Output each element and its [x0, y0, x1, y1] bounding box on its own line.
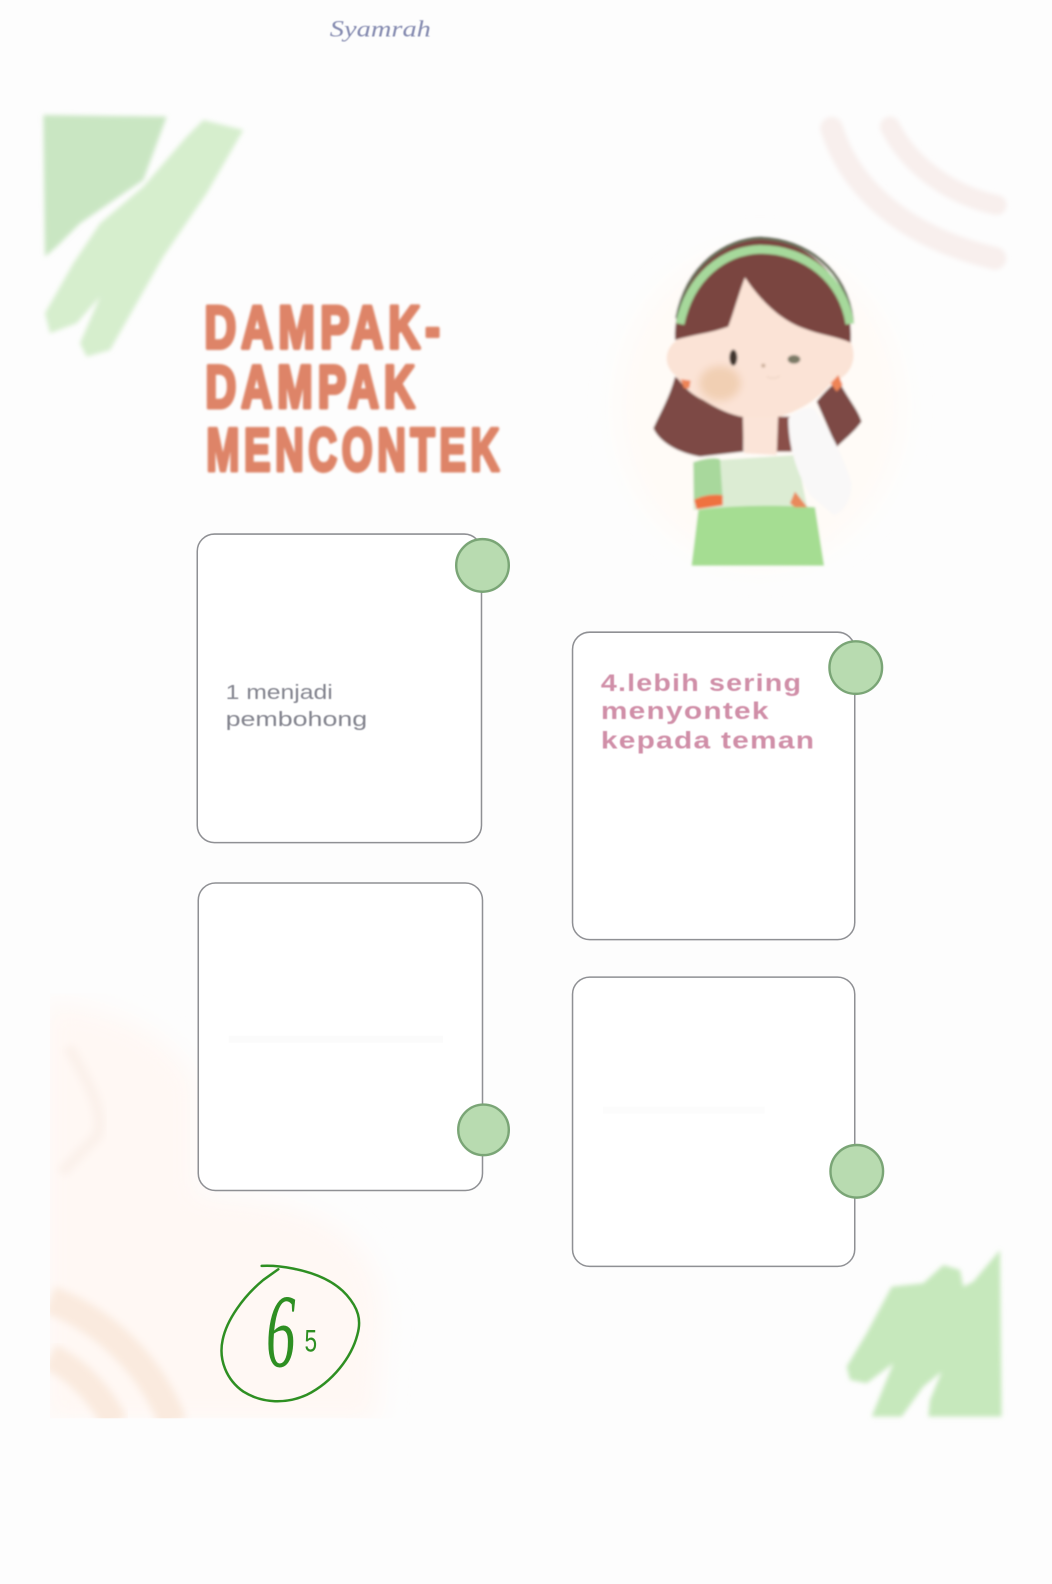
- strap right: [790, 492, 807, 507]
- mouth: [767, 376, 780, 378]
- score 65: 6: [266, 1274, 296, 1390]
- soft glow behind the girl: [617, 247, 903, 567]
- lower hair right: [817, 380, 862, 447]
- decoration: peach blob bottom-left: [50, 1023, 364, 1418]
- title: [204, 293, 504, 483]
- title line 2: DAMPAK: [205, 353, 420, 421]
- neck: [743, 410, 778, 455]
- illustration: girl with headband: [617, 237, 903, 567]
- nose: [761, 364, 765, 368]
- card 1: [197, 534, 509, 843]
- card 4 text: 4.lebih sering: [601, 670, 802, 697]
- card 4 badge: [829, 641, 882, 694]
- headband: [680, 249, 850, 324]
- neck shadow: [775, 417, 792, 452]
- decoration: green brush bottom-right: [847, 1250, 1002, 1417]
- hand-drawn circle: [222, 1266, 359, 1401]
- shirt: [693, 455, 807, 510]
- hair fringe: [675, 237, 851, 343]
- card 4 text: kepada teman: [601, 728, 815, 755]
- teacher's green score circle: 5: [304, 1323, 317, 1358]
- card 3 badge: [830, 1145, 883, 1198]
- card 3: [573, 977, 883, 1266]
- eye left: [729, 350, 737, 366]
- card 4 text: menyontek: [601, 698, 770, 725]
- arm: [788, 408, 852, 515]
- handwritten name: Syamrah: [330, 16, 431, 42]
- card 1 text: 1 menjadi: [226, 682, 333, 704]
- decoration: pink arcs top-right: [832, 127, 997, 258]
- card 4: [573, 632, 882, 940]
- card 3 faded text: [603, 1107, 765, 1114]
- teacher's green score circle: [222, 1266, 359, 1401]
- earring left: [681, 379, 691, 388]
- sleeve left: [693, 458, 723, 500]
- strap left: [694, 495, 723, 509]
- eye right winking: [788, 355, 800, 364]
- card 2 badge: [458, 1105, 509, 1155]
- decoration: green brush top-left: [43, 115, 243, 357]
- title line 3: MENCONTEK: [206, 415, 504, 483]
- card 2: [198, 883, 509, 1191]
- face: [667, 270, 854, 417]
- earring right: [831, 375, 843, 392]
- card 2 faded text: [229, 1036, 443, 1043]
- headband edge: [677, 238, 852, 320]
- lower hair left: [653, 377, 743, 457]
- title line 1: DAMPAK-: [204, 293, 445, 361]
- card 1 badge: [456, 539, 509, 592]
- overall: [692, 506, 824, 566]
- cheek: [699, 366, 741, 401]
- card 1 text: pembohong: [226, 709, 367, 731]
